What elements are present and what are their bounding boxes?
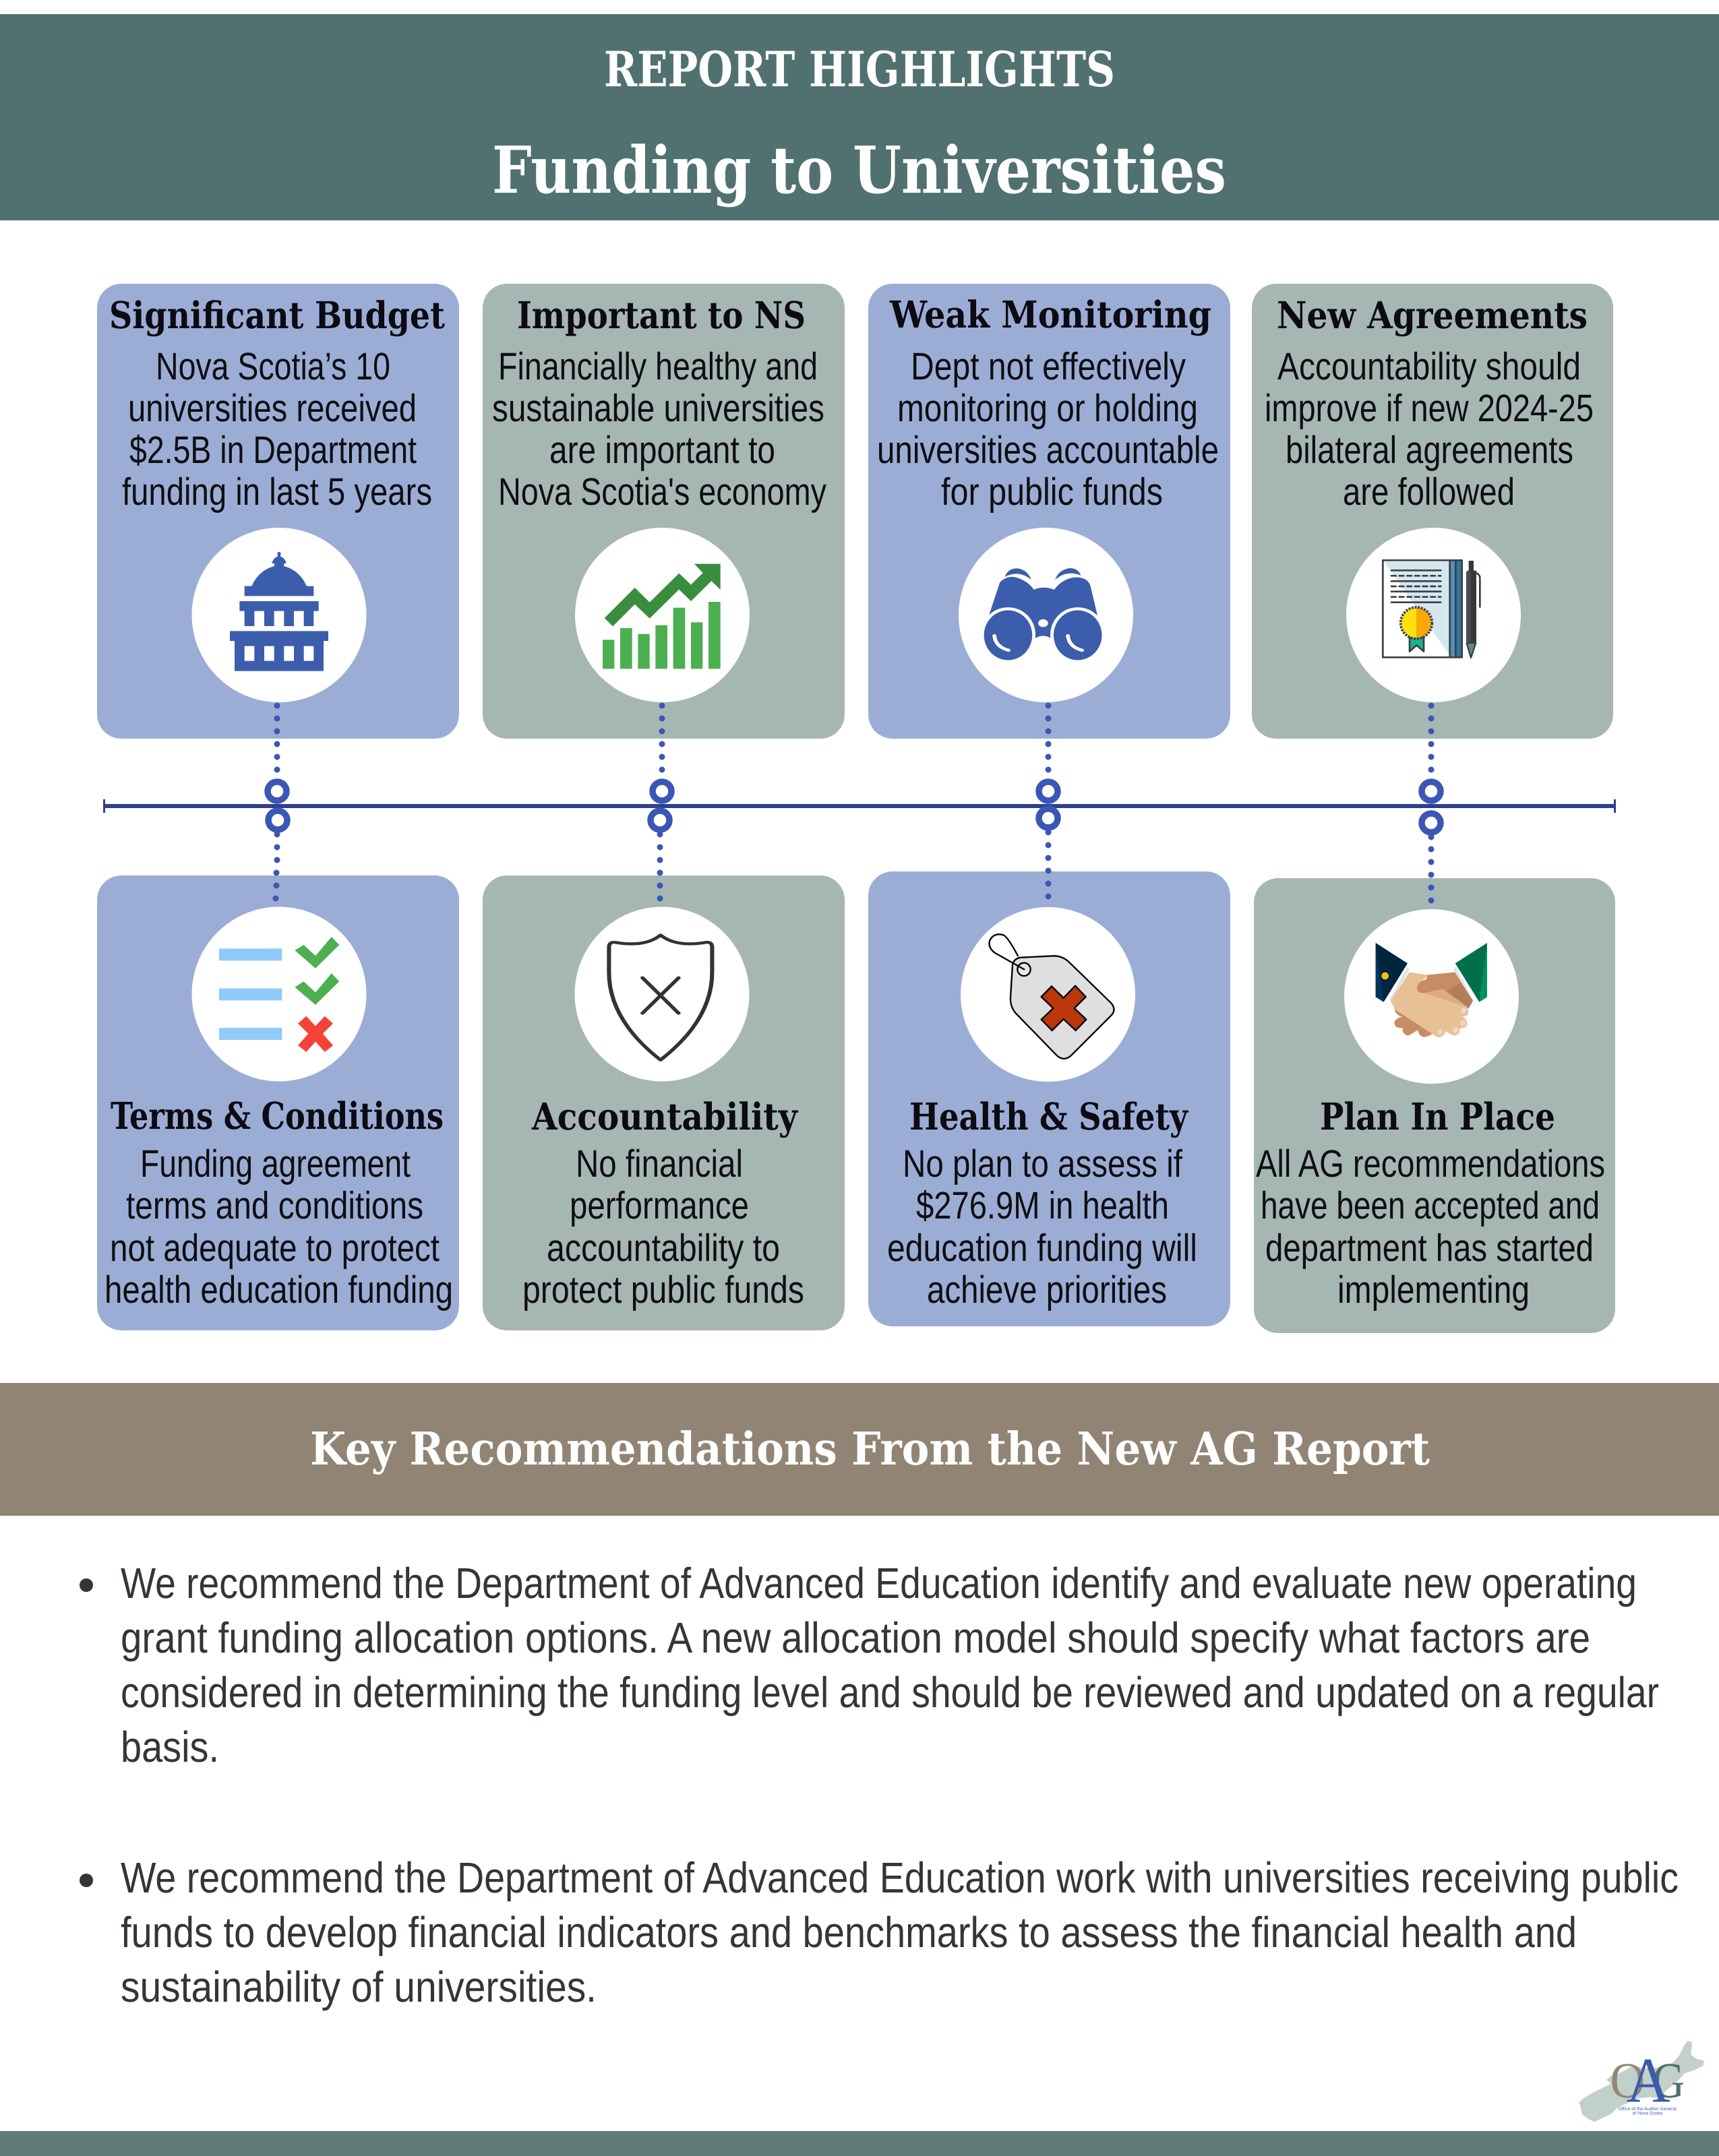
connector: column 2 [651,702,671,902]
panel: Plan In Place [1254,878,1615,1333]
body text: health education funding [104,1268,453,1312]
heading: New Agreements [1277,293,1588,337]
panel: Significant Budget [97,284,459,739]
body text: No plan to assess if [903,1142,1182,1185]
connector: column 3 [1039,702,1058,899]
body text: Dept not effectively [911,345,1186,388]
body text [492,345,826,514]
body text [522,1142,804,1312]
body text [877,345,1219,514]
icon: binoculars [959,528,1133,702]
body text [1256,1142,1605,1312]
logo: Office of the Auditor General: of Nova Scotia [1633,2111,1662,2116]
body text: improve if new 2024-25 [1265,387,1594,430]
logo: Office of the Auditor General: G [1653,2052,1685,2108]
footer band [0,2131,1719,2156]
heading: Significant Budget [109,293,446,337]
icon: growth chart [575,528,750,702]
body text: sustainable universities [492,387,824,430]
body text: universities received [128,387,417,430]
timeline axis [103,799,1616,813]
body text: bilateral agreements [1286,429,1573,472]
icon: shield with cross [574,907,750,1081]
banner heading: Key Recommendations From the New AG Report [310,1422,1430,1475]
panel: Weak Monitoring [868,284,1230,739]
icon: checklist [191,907,367,1081]
body text: monitoring or holding [897,387,1198,430]
body text: department has started [1265,1227,1594,1270]
recommendations banner [0,1383,1719,1516]
body text: education funding will [887,1227,1197,1270]
logo: Office of the Auditor General [1579,2041,1704,2122]
logo: Office of the Auditor General: O [1610,2052,1645,2108]
body text: terms and conditions [126,1184,423,1227]
connector: column 1 [268,702,287,902]
body text: No financial [576,1142,743,1185]
logo: Office of the Auditor General: Office of the Auditor General [1619,2106,1677,2112]
panel: Terms and Conditions [97,875,459,1330]
body text: not adequate to protect [110,1227,440,1270]
body text: are important to [549,429,775,472]
panel: New Agreements [1252,284,1613,739]
body text: for public funds [941,470,1163,514]
body text [104,1142,453,1312]
heading: Important to NS [517,293,806,337]
heading: Plan In Place [1320,1095,1555,1138]
icon: certificate and pen [1346,528,1521,702]
body text: performance [570,1184,749,1227]
panel: Accountability [483,875,845,1330]
body text: Accountability should [1277,345,1581,388]
body text [122,345,432,514]
body text: All AG recommendations [1256,1142,1605,1185]
recommendation 1: basis. [121,1723,219,1771]
body text: Funding agreement [140,1142,411,1185]
body text: are followed [1343,470,1515,514]
body text: implementing [1337,1268,1530,1312]
heading: Health & Safety [909,1095,1189,1138]
body text: $2.5B in Department [129,429,417,472]
title: Funding to Universities [492,132,1226,208]
body text: universities accountable [877,429,1219,472]
body text: funding in last 5 years [122,470,432,514]
heading: Terms & Conditions [111,1094,444,1138]
logo: Office of the Auditor General: A [1627,2045,1670,2116]
icon: capitol building [191,528,367,702]
panel: Important to NS [483,284,845,739]
body text: Nova Scotia’s 10 [156,345,390,388]
body text: accountability to [547,1227,780,1270]
icon: price tag with cross [961,907,1135,1082]
header band [0,14,1719,220]
panel: Health and Safety [868,871,1230,1326]
icon: handshake [1344,909,1519,1084]
body text: protect public funds [522,1268,804,1312]
heading: Accountability [531,1095,799,1138]
body text: $276.9M in health [916,1184,1169,1227]
body text [887,1142,1197,1312]
recommendation 2 [80,1853,1679,2011]
body text: achieve priorities [927,1268,1167,1312]
heading: Weak Monitoring [889,292,1211,336]
recommendation 2: sustainability of universities. [121,1963,597,2011]
body text: have been accepted and [1261,1184,1600,1227]
body text: Nova Scotia's economy [498,470,826,514]
connector: column 4 [1422,702,1441,903]
body text [1265,345,1594,514]
body text: Financially healthy and [498,345,818,388]
recommendation 1 [80,1559,1659,1771]
report highlights heading: REPORT HIGHLIGHTS [604,40,1115,98]
